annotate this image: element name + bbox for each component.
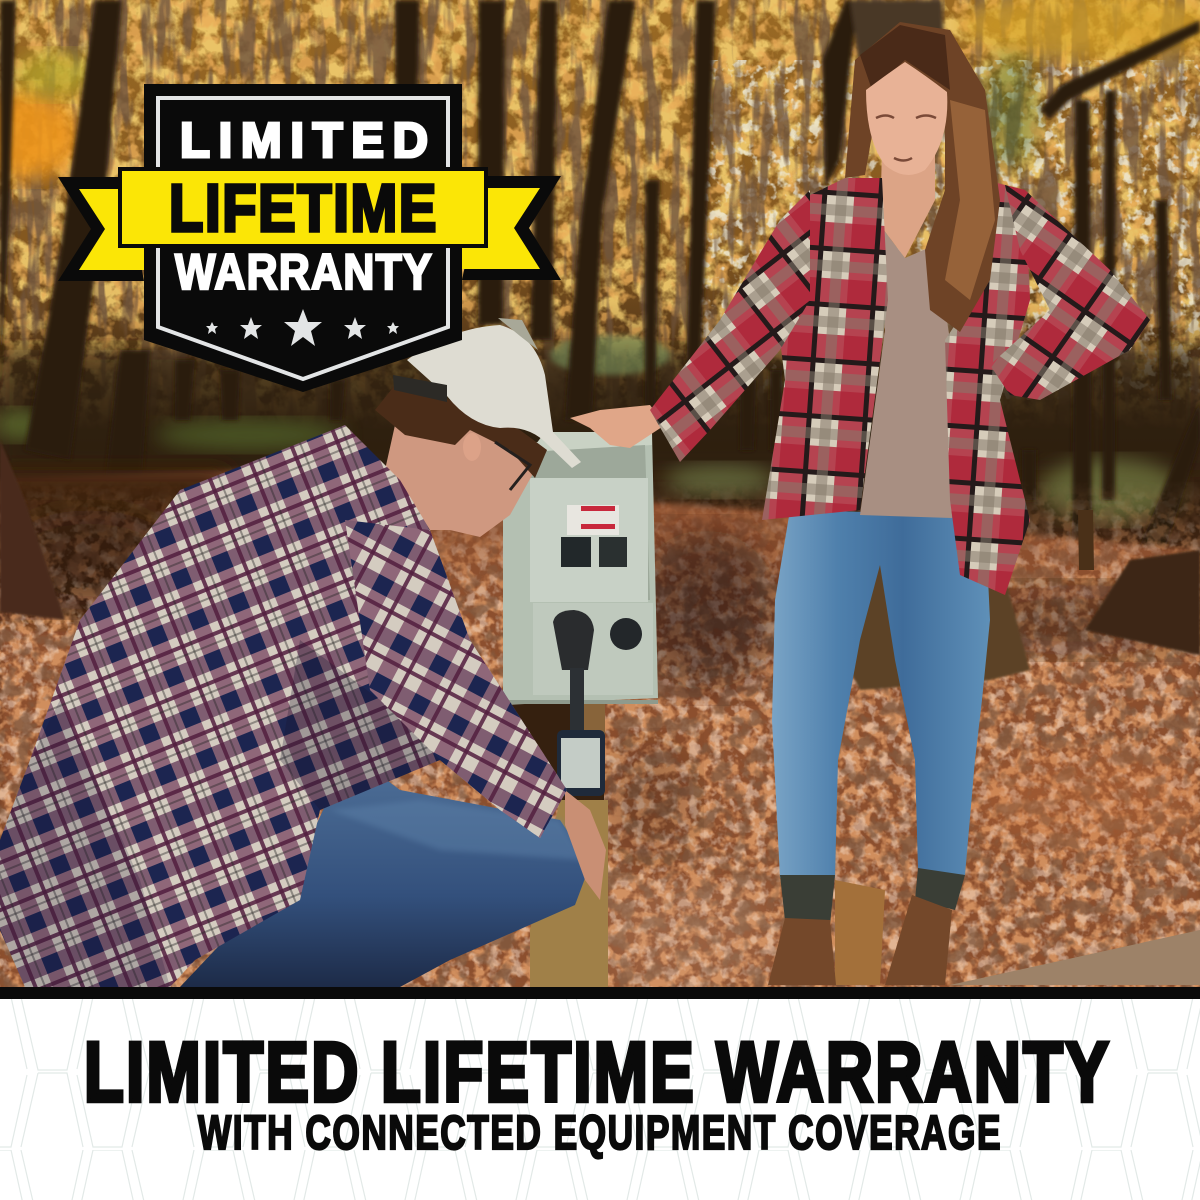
heading: warranty: WARRANTY	[175, 244, 433, 300]
tester meter	[557, 730, 605, 796]
forest floor of fallen leaves	[0, 470, 1200, 987]
stumps and roots	[0, 440, 1200, 985]
baseball cap	[407, 325, 581, 468]
shield	[144, 84, 462, 392]
woman's hair	[845, 22, 1000, 332]
hexagon background	[0, 997, 1200, 1200]
rating stars	[206, 309, 399, 346]
left sleeve	[650, 190, 810, 462]
man's hair	[375, 385, 547, 478]
shield inner border	[158, 98, 448, 379]
warning label	[567, 505, 619, 535]
heading: lifetime: LIFETIME	[169, 171, 438, 246]
power pedestal	[503, 432, 658, 987]
flannel sleeve	[345, 520, 567, 838]
black divider bar	[0, 987, 1200, 999]
man's hand	[565, 790, 606, 900]
background tree trunks	[0, 0, 1200, 570]
boots	[768, 918, 836, 985]
socks	[780, 875, 835, 925]
ribbon tails	[58, 176, 561, 281]
woman standing	[570, 22, 1150, 985]
taupe top	[860, 225, 952, 518]
woman's hand on cabinet	[570, 405, 665, 448]
wooden post	[512, 703, 604, 800]
right panel and sleeve	[945, 180, 1030, 595]
man's jeans	[180, 760, 590, 987]
neck	[880, 150, 935, 258]
breakers	[561, 537, 591, 567]
cabinet body	[503, 432, 658, 705]
footer panel	[0, 987, 1200, 1200]
yellow banner	[118, 167, 488, 248]
ear	[463, 433, 481, 461]
facial features	[876, 116, 936, 160]
plaid shirt	[762, 178, 888, 520]
woman's jeans	[772, 510, 990, 878]
glasses	[495, 442, 530, 490]
flannel shirt	[0, 425, 567, 987]
round outlet	[610, 618, 642, 650]
man kneeling	[0, 318, 606, 987]
woman's face	[866, 62, 947, 175]
heading: limited: LIMITED	[180, 114, 428, 168]
plug and cord	[553, 610, 594, 670]
warranty badge	[58, 84, 561, 392]
man's neck and face	[385, 425, 535, 537]
